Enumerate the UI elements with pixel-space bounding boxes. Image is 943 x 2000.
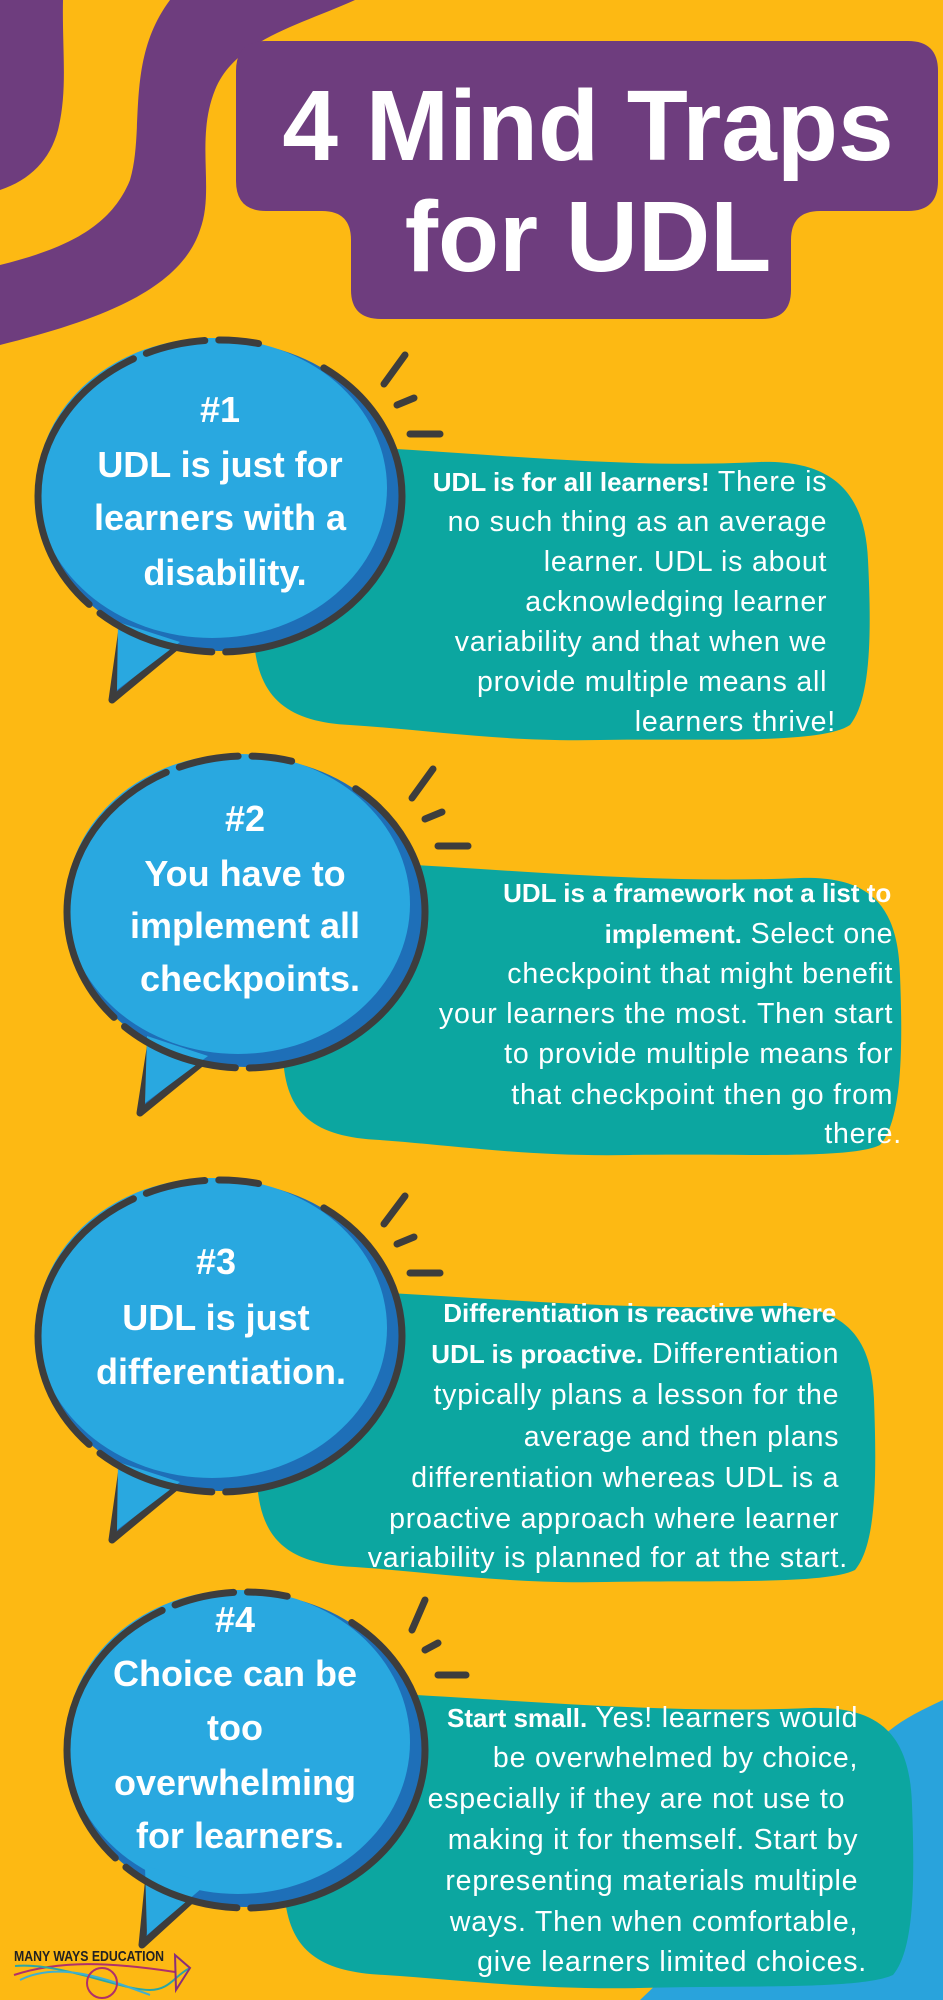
panel: answer 2: to provide multiple means for bbox=[504, 1038, 893, 1070]
panel: answer 4: be overwhelmed by choice, bbox=[493, 1742, 858, 1774]
bubble 1 text: #1 bbox=[200, 389, 240, 430]
panel: answer 2: there. bbox=[824, 1118, 902, 1150]
panel: answer 3: variability is planned for at the start. bbox=[368, 1542, 848, 1574]
bubble 4 text: #4 bbox=[215, 1599, 255, 1640]
bubble 1 text: disability. bbox=[143, 552, 307, 593]
panel: answer 2: checkpoint that might benefit bbox=[507, 958, 893, 990]
panel: answer 2: your learners the most. Then start bbox=[439, 998, 893, 1030]
speech bubble 1 bbox=[37, 338, 402, 700]
panel: answer 2: UDL is a framework not a list to bbox=[503, 878, 891, 908]
panel: answer 1: learner. UDL is about bbox=[544, 546, 827, 578]
panel: answer 1: learners thrive! bbox=[635, 706, 836, 738]
speech bubble 4 bbox=[66, 1590, 425, 1945]
icon: rays 2 bbox=[412, 769, 468, 846]
panel: answer 1: provide multiple means all bbox=[477, 666, 827, 698]
panel: answer 4: especially if they are not use to bbox=[428, 1783, 845, 1815]
speech bubble 3 bbox=[37, 1178, 402, 1540]
panel: answer 3: Differentiation is reactive where bbox=[443, 1298, 836, 1328]
bubble 4 text: overwhelming bbox=[114, 1762, 356, 1803]
speech bubble 2 bbox=[66, 754, 425, 1113]
icon: rays 3 bbox=[384, 1196, 440, 1273]
panel: answer 3: proactive approach where learner bbox=[389, 1503, 839, 1535]
title box bbox=[236, 41, 938, 319]
panel: answer 1: acknowledging learner bbox=[525, 586, 827, 618]
bubble 1 text: UDL is just for bbox=[97, 444, 343, 485]
panel: answer 2: implement. Select one bbox=[605, 918, 893, 950]
panel: answer 2: that checkpoint then go from bbox=[511, 1079, 893, 1111]
panel: answer 3: differentiation whereas UDL is a bbox=[411, 1462, 839, 1494]
panel: answer 4: representing materials multiple bbox=[445, 1865, 858, 1897]
panel: answer 4: give learners limited choices. bbox=[477, 1946, 867, 1978]
bubble 3 text: differentiation. bbox=[96, 1351, 346, 1392]
panel: answer 1: variability and that when we bbox=[455, 626, 827, 658]
panel: answer 4 bbox=[281, 1691, 913, 1988]
panel: answer 1 bbox=[252, 445, 870, 740]
panel: answer 4: ways. Then when comfortable, bbox=[449, 1906, 858, 1938]
logo: Many Ways Education bbox=[14, 1948, 190, 1998]
icon: rays 4 bbox=[412, 1600, 466, 1675]
bubble 4 text: for learners. bbox=[136, 1815, 344, 1856]
panel: answer 3: UDL is proactive. Differentiation bbox=[431, 1338, 839, 1370]
bubble 2 text: checkpoints. bbox=[140, 958, 360, 999]
icon: rays 1 bbox=[384, 355, 440, 434]
bubble 1 text: learners with a bbox=[94, 497, 347, 538]
bubble 3 text: #3 bbox=[196, 1241, 236, 1282]
bubble 3 text: UDL is just bbox=[122, 1297, 310, 1338]
bubble 4 text: Choice can be bbox=[113, 1653, 357, 1694]
panel: answer 1: no such thing as an average bbox=[448, 506, 827, 538]
panel: answer 4: Start small. Yes! learners would bbox=[447, 1702, 858, 1734]
bubble 2 text: implement all bbox=[130, 905, 360, 946]
bubble 4 text: too bbox=[207, 1707, 263, 1748]
title text: 4 Mind Traps bbox=[282, 70, 894, 182]
panel: answer 4: making it for themself. Start by bbox=[448, 1824, 858, 1856]
bubble 2 text: You have to bbox=[144, 853, 346, 894]
panel: answer 3 bbox=[255, 1289, 875, 1582]
decorative blue corner shape bbox=[640, 1700, 943, 2000]
bubble 2 text: #2 bbox=[225, 798, 265, 839]
decorative purple waves bbox=[0, 0, 355, 345]
panel: answer 1: UDL is for all learners! There is bbox=[433, 466, 827, 498]
panel: answer 3: average and then plans bbox=[524, 1421, 839, 1453]
logo: Many Ways Education: MANY WAYS EDUCATION bbox=[14, 1948, 164, 1965]
panel: answer 2 bbox=[281, 861, 902, 1155]
title box: for UDL bbox=[405, 181, 771, 293]
panel: answer 3: typically plans a lesson for the bbox=[433, 1379, 839, 1411]
